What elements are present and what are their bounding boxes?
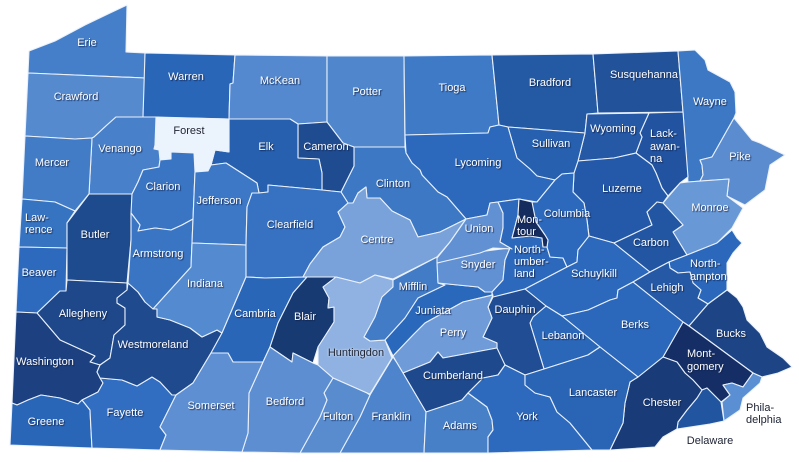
label: Washington: Washington <box>16 356 74 368</box>
county: Monroe <box>663 179 743 255</box>
county: Greene <box>10 395 92 448</box>
county: Elk <box>211 119 322 193</box>
label: Clearfield: Clearfield <box>267 219 313 231</box>
county: Cameron <box>298 122 354 192</box>
label: Crawford: Crawford <box>54 91 98 103</box>
label: Cambria: Cambria <box>234 308 277 320</box>
label: Fayette: Fayette <box>107 407 143 419</box>
county: Clarion <box>131 152 195 231</box>
label: Susquehanna: Susquehanna <box>610 69 679 81</box>
county: Juniata <box>385 283 492 356</box>
county: Delaware <box>677 388 724 429</box>
county: Warren <box>143 53 235 119</box>
label: Northampton: ampton <box>690 271 727 283</box>
label: Snyder: Snyder <box>461 259 496 271</box>
label: Westmoreland: Westmoreland <box>118 339 188 351</box>
county: Sullivan <box>508 127 585 180</box>
label: Columbia: Columbia <box>544 208 591 220</box>
label: Allegheny: Allegheny <box>59 308 108 320</box>
county: Crawford <box>25 73 145 139</box>
county: Lawrence <box>19 199 75 248</box>
county: Chester <box>610 357 702 450</box>
county: Bradford <box>492 54 598 133</box>
label: Northumberland: umber- <box>514 256 549 268</box>
label: Monroe: Monroe <box>691 202 729 214</box>
label: Greene: Greene <box>28 416 64 428</box>
label: Montgomery: Mont- <box>687 348 715 360</box>
label: Wayne: Wayne <box>693 96 727 108</box>
county: Fayette <box>82 377 176 450</box>
label: Fulton: Fulton <box>323 411 353 423</box>
county: Wyoming <box>578 113 649 161</box>
label: Philadelphia: Phila- <box>746 402 774 414</box>
county: Bucks <box>689 290 792 377</box>
county: Venango <box>89 117 160 194</box>
label: Northampton: North- <box>690 258 721 270</box>
county: Beaver <box>16 247 67 313</box>
label: Venango: Venango <box>98 143 142 155</box>
label: Bucks: Bucks <box>716 328 746 340</box>
label: Philadelphia: delphia <box>746 414 782 426</box>
county: Cumberland <box>403 348 505 412</box>
county: Somerset <box>160 353 263 452</box>
county: Columbia <box>519 173 589 267</box>
county: Lycoming <box>405 125 555 219</box>
label: Clarion: Clarion <box>146 181 180 193</box>
label: Lackawanna: awan- <box>650 141 680 153</box>
label: Lackawanna: na <box>650 153 663 165</box>
label: Forest: Forest <box>173 125 205 137</box>
label: Cumberland: Cumberland <box>423 370 483 382</box>
label: Union: Union <box>465 223 493 235</box>
label: Tioga: Tioga <box>438 82 466 94</box>
label: Somerset: Somerset <box>187 400 235 412</box>
county: Cambria <box>211 277 307 362</box>
label: Lackawanna: Lack- <box>650 128 677 140</box>
label: Lancaster: Lancaster <box>569 387 617 399</box>
county: Schuylkill <box>525 236 650 316</box>
label: Warren: Warren <box>168 71 204 83</box>
label: Adams: Adams <box>443 420 478 432</box>
county: Tioga <box>404 55 499 135</box>
label: Pike: Pike <box>729 151 751 163</box>
label: Berks: Berks <box>621 319 650 331</box>
label: Montgomery: gomery <box>687 361 724 373</box>
label: Mifflin: Mifflin <box>399 281 427 293</box>
label: McKean: McKean <box>260 75 300 87</box>
county: Wayne <box>678 50 736 182</box>
county: Mifflin <box>364 257 445 341</box>
county: Blair <box>270 277 336 363</box>
label: York: York <box>516 411 538 423</box>
label: Lawrence: rence <box>25 224 53 236</box>
label: Northumberland: North- <box>514 244 545 256</box>
label: Franklin: Franklin <box>371 411 411 423</box>
county: Forest <box>154 117 229 172</box>
county: Susquehanna <box>593 51 683 113</box>
label: Juniata: Juniata <box>415 305 452 317</box>
label: Jefferson: Jefferson <box>196 195 242 207</box>
label: Armstrong: Armstrong <box>133 248 183 260</box>
label: Beaver: Beaver <box>22 267 57 279</box>
county: Indiana <box>153 243 246 337</box>
label: Dauphin: Dauphin <box>495 304 535 316</box>
label: Lehigh: Lehigh <box>650 282 684 294</box>
county: Berks <box>562 282 683 377</box>
county: Lancaster <box>525 347 638 450</box>
label: Sullivan: Sullivan <box>532 138 570 150</box>
label: Lawrence: Law- <box>25 212 49 224</box>
county: Northampton <box>669 230 742 304</box>
county: Pike <box>700 118 785 205</box>
label: Montour: tour <box>517 226 536 238</box>
county: Butler <box>67 194 132 283</box>
county: Dauphin <box>483 289 546 375</box>
label: Centre: Centre <box>360 234 394 246</box>
label: Huntingdon: Huntingdon <box>328 347 384 359</box>
county: Allegheny <box>37 280 127 365</box>
label: Erie: Erie <box>77 37 97 49</box>
county: Erie <box>28 5 145 78</box>
county: McKean <box>229 55 327 124</box>
county: Washington <box>12 312 103 405</box>
label: Potter: Potter <box>352 86 382 98</box>
label: Blair: Blair <box>294 311 316 323</box>
county: Centre <box>303 187 466 283</box>
county: Mercer <box>22 136 92 211</box>
label: Chester: Chester <box>643 397 682 409</box>
county: Fulton <box>300 378 370 453</box>
label: Wyoming: Wyoming <box>590 123 636 135</box>
label: Mercer: Mercer <box>35 157 69 169</box>
label: Perry: Perry <box>440 327 467 339</box>
label: Bedford: Bedford <box>266 396 304 408</box>
label: Northumberland: land <box>514 268 535 280</box>
county: Perry <box>393 295 497 373</box>
label: Cameron: Cameron <box>303 141 349 153</box>
label: Luzerne: Luzerne <box>602 183 642 195</box>
county: Adams <box>424 393 493 453</box>
label: Butler: Butler <box>81 229 110 241</box>
county: Carbon <box>614 202 687 272</box>
county: Clinton <box>341 147 466 237</box>
county: Montour <box>512 199 548 247</box>
label: Indiana: Indiana <box>187 278 224 290</box>
label: Montour: Mon- <box>517 214 542 226</box>
county: Luzerne <box>573 153 668 243</box>
county: Lehigh <box>633 262 708 326</box>
county: Clearfield <box>246 185 348 278</box>
county: Philadelphia <box>722 373 762 421</box>
county: Armstrong <box>128 213 193 309</box>
county: Montgomery <box>663 322 753 402</box>
label: Schuylkill: Schuylkill <box>571 268 617 280</box>
county: Northumberland <box>492 199 567 298</box>
label: Bradford: Bradford <box>529 77 571 89</box>
label: Elk: Elk <box>258 141 274 153</box>
county: Bedford <box>242 347 333 453</box>
county: Jefferson <box>192 163 259 245</box>
county: York <box>468 365 592 453</box>
county: Franklin <box>340 357 426 453</box>
county: Potter <box>327 56 405 147</box>
county: Westmoreland <box>97 283 222 395</box>
county: Union <box>437 202 512 263</box>
county: Lebanon <box>530 306 600 369</box>
county: Huntingdon <box>318 275 393 394</box>
county: Snyder <box>437 248 510 292</box>
label: Lebanon: Lebanon <box>542 330 584 342</box>
county: Lackawanna <box>636 112 688 196</box>
label: Carbon: Carbon <box>633 237 669 249</box>
label: Clinton: Clinton <box>376 178 410 190</box>
label: Delaware: Delaware <box>687 435 733 447</box>
label: Lycoming: Lycoming <box>455 157 501 169</box>
